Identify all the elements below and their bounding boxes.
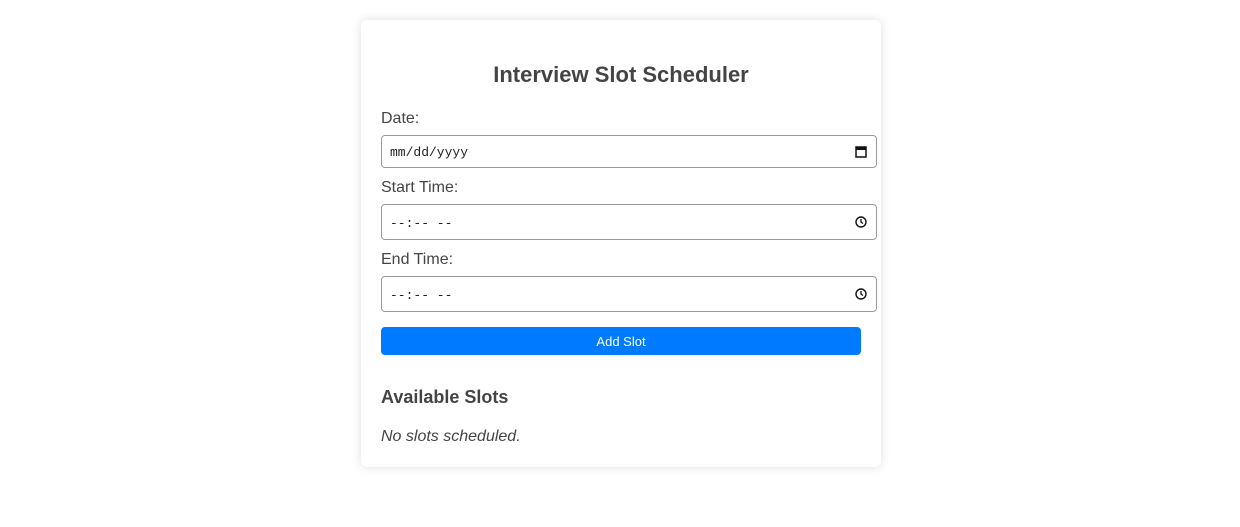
icon: calendar [855,146,867,158]
button: add slot [381,327,861,355]
input: start time: --:-- -- [390,216,452,231]
icon: clock [855,216,867,228]
input: start time [381,204,877,240]
label: start time: Start Time: [381,179,458,196]
label: end time: End Time: [381,251,453,268]
title: Interview Slot Scheduler [493,62,749,87]
text: empty state: No slots scheduled. [381,428,521,445]
input: end time [381,276,877,312]
input: date: mm/dd/yyyy [390,145,468,160]
heading: available slots: Available Slots [381,387,508,407]
button: add slot: Add Slot [596,334,646,349]
icon: clock [855,288,867,300]
label: date: Date: [381,110,419,127]
input: date [381,135,877,168]
input: end time: --:-- -- [390,288,452,303]
card panel [361,20,881,467]
